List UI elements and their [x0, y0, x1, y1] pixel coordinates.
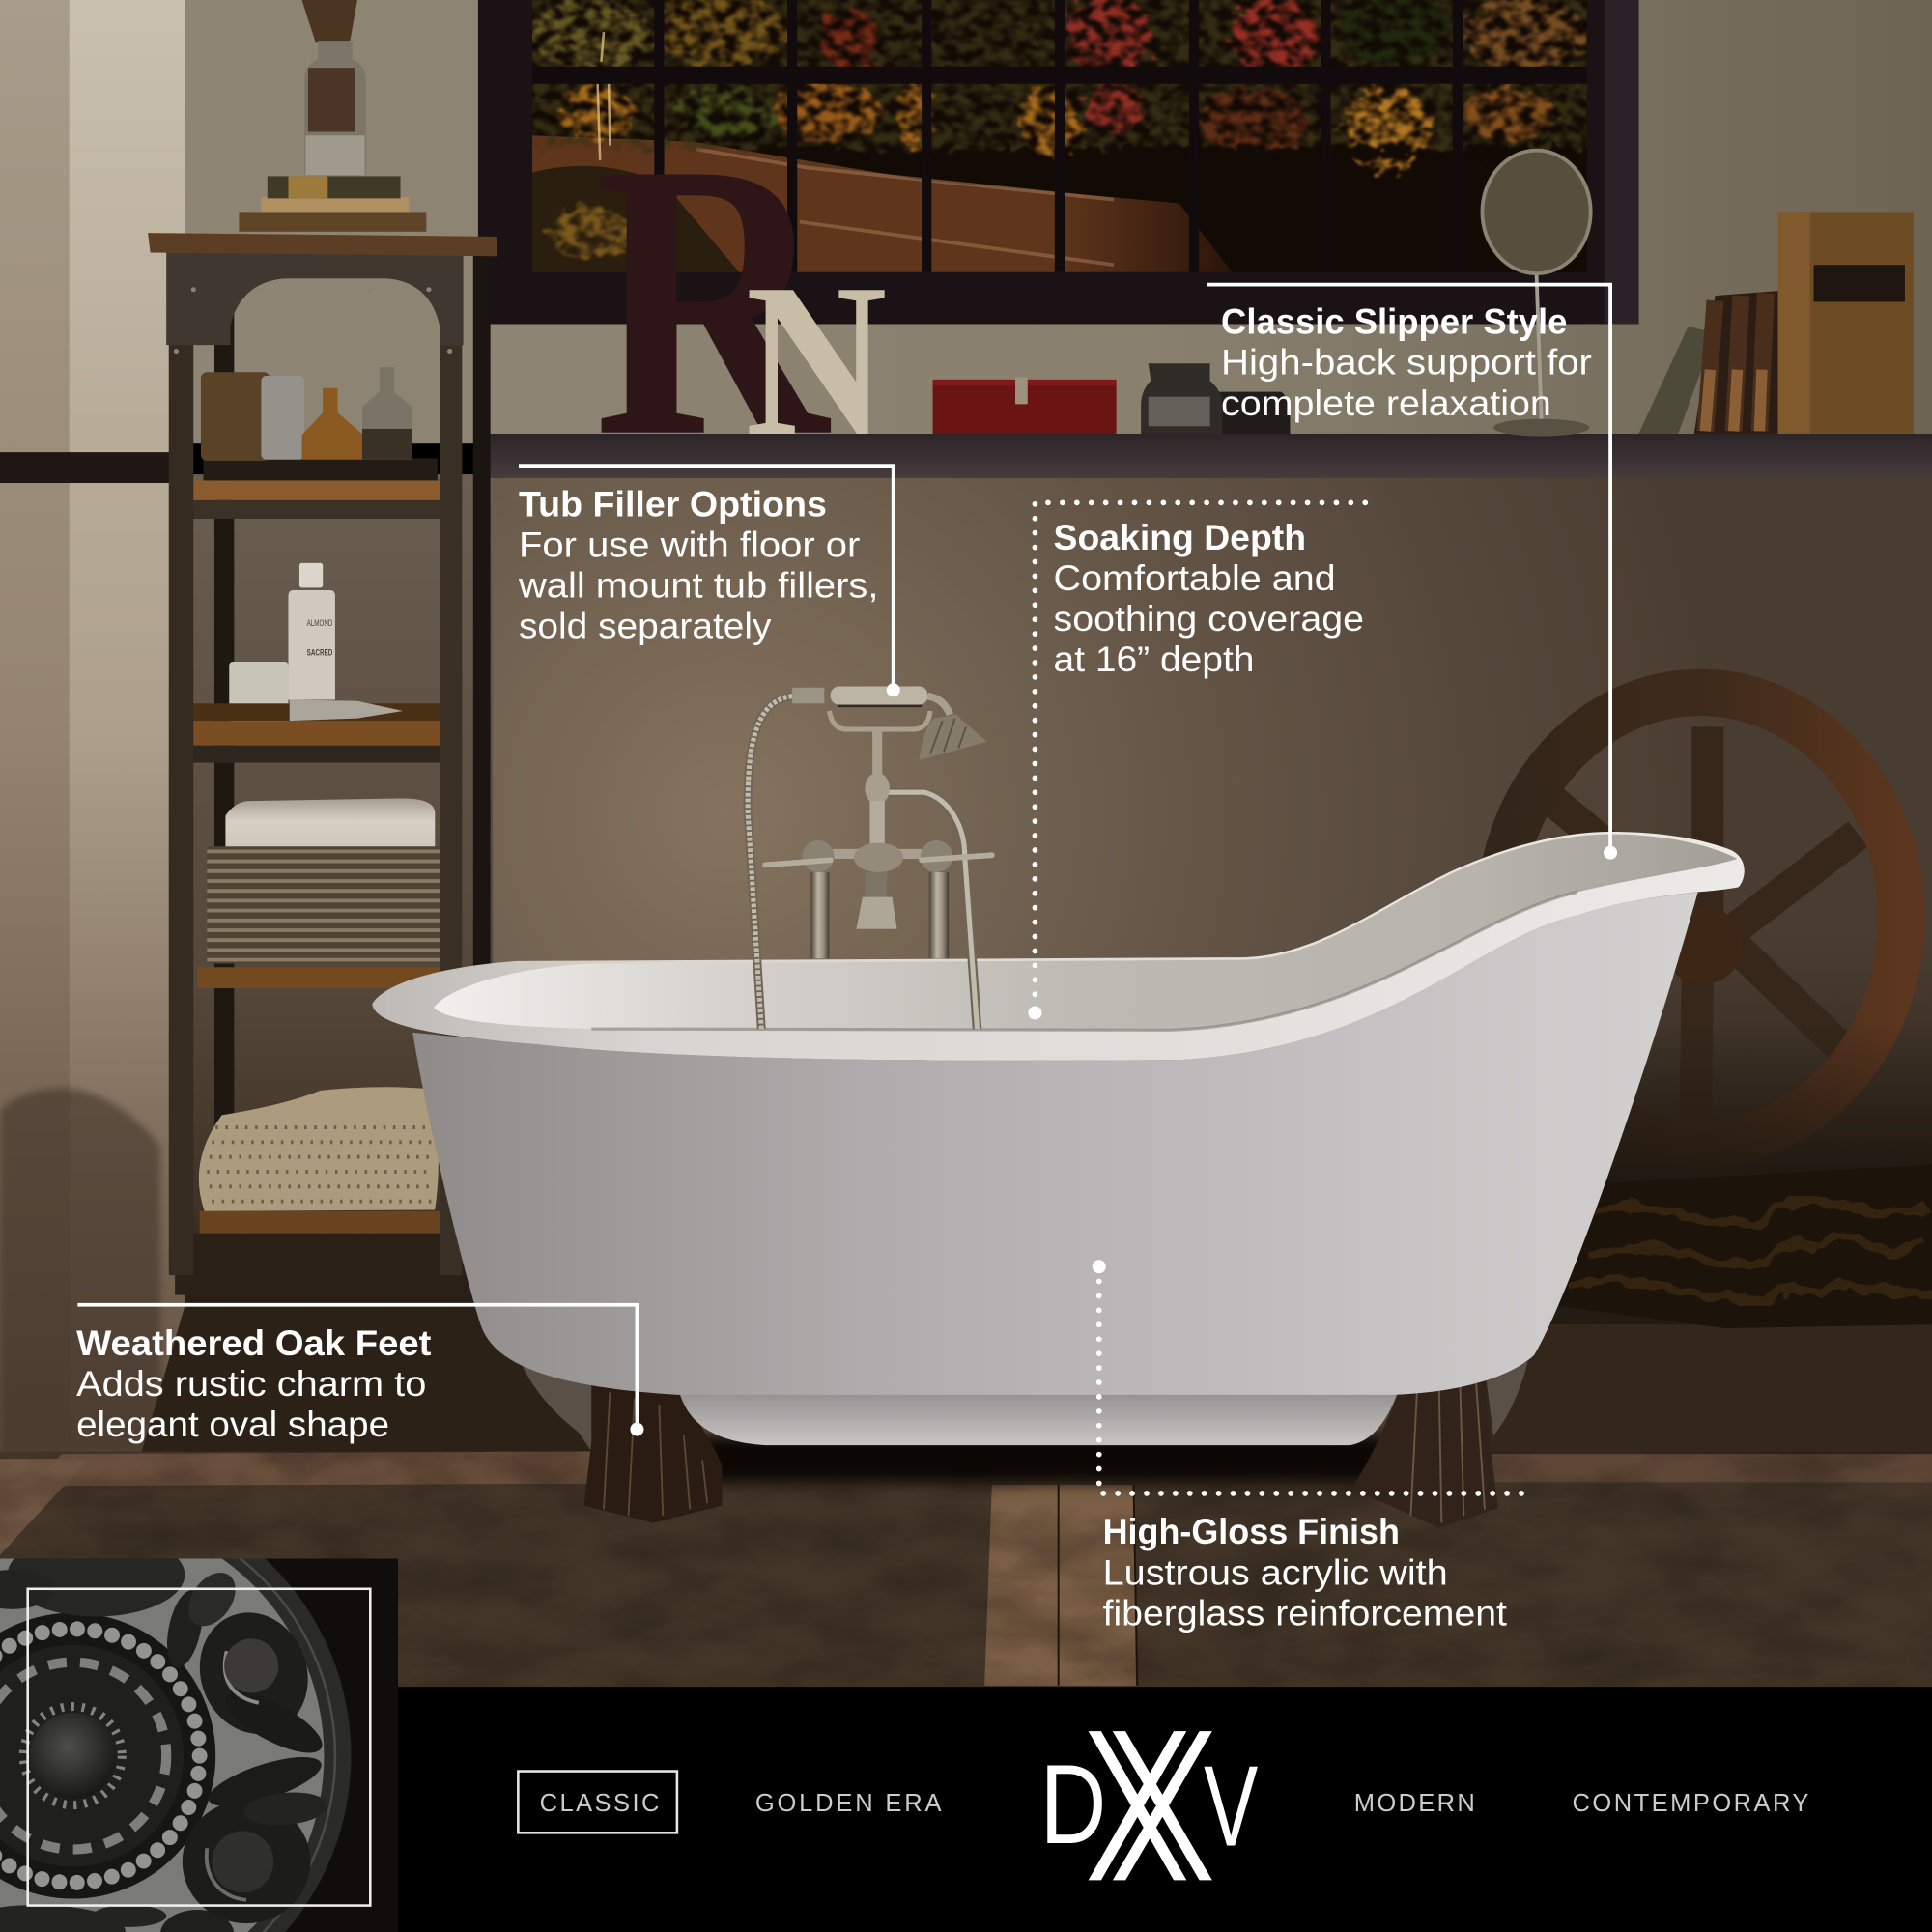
upper scroll coil: [199, 1612, 308, 1734]
horizontal muntin: [532, 67, 1587, 84]
foot grain: [1410, 1382, 1485, 1523]
leader dot: [630, 1423, 643, 1436]
tub pedestal base: [678, 1386, 1400, 1445]
table mirror: [1482, 151, 1591, 437]
silver tube: [290, 699, 403, 721]
floor back zone: [1479, 1324, 1932, 1455]
heading: Tub Filler Options: [519, 484, 827, 524]
shelf upper surface two: [191, 703, 441, 721]
nav: modern: MODERN: [1354, 1790, 1475, 1817]
floor texture: [0, 1452, 1932, 1688]
foot grain: [604, 1392, 707, 1516]
back left post: [214, 277, 234, 1263]
body line 2: wall mount tub fillers,: [518, 566, 878, 606]
table top plank: [148, 233, 497, 256]
nav: contemporary: CONTEMPORARY: [1573, 1790, 1808, 1817]
lower scroll coil: [183, 1801, 310, 1923]
nav: classic: CLASSIC: [540, 1790, 659, 1817]
bottle dark fill: [362, 429, 412, 460]
heading: Soaking Depth: [1054, 518, 1306, 557]
left hose highlight: [748, 696, 792, 1029]
valve hub: [854, 842, 903, 872]
floor shadow under tub: [690, 1435, 1405, 1482]
apothecary jars: [1141, 363, 1290, 434]
glass bottle: [362, 367, 412, 460]
footer bar: [398, 1687, 1932, 1932]
bottle: [304, 41, 366, 175]
dictionary spine: [1778, 212, 1810, 434]
medallion: [0, 1559, 352, 1932]
scroll top left: [0, 1570, 54, 1609]
right front post: [440, 252, 462, 1275]
leaf upper right: [179, 1564, 245, 1634]
wheel hub: [1663, 906, 1743, 984]
leader dot: [1604, 846, 1617, 860]
dictionary label: [1814, 265, 1905, 301]
tub rim: [372, 832, 1745, 1061]
left valve: [802, 840, 835, 872]
mirror base: [1493, 419, 1589, 437]
letter N decor: N: [746, 240, 887, 482]
pedestal grain: [1571, 1202, 1928, 1301]
left oak foot: [584, 1374, 722, 1523]
middle book: [261, 197, 409, 212]
book spines: [1705, 294, 1766, 431]
rim pale line: [239, 1559, 336, 1932]
spout neck: [865, 872, 887, 899]
nav: golden era: GOLDEN ERA: [755, 1790, 941, 1817]
bottle label: [308, 68, 355, 131]
upper scroll crescent: [225, 1651, 259, 1703]
heading: Classic Slipper Style: [1221, 302, 1567, 342]
feathers: [301, 0, 357, 42]
body line 1: Comfortable and: [1054, 558, 1336, 598]
hillside fence lines: [696, 149, 1114, 265]
amber bottle: [301, 388, 363, 460]
shelving unit: [148, 0, 497, 1295]
handshower connector: [792, 688, 824, 703]
white bottle: [288, 563, 335, 699]
box clasp: [1015, 377, 1028, 404]
right oak foot: [1351, 1375, 1498, 1528]
top book patch: [288, 176, 327, 198]
cross connector: [831, 850, 924, 858]
unit lower apron: [175, 1234, 470, 1295]
stacked books: [239, 176, 426, 232]
outdoor scene: [529, 0, 1589, 272]
storage jar: [201, 372, 270, 461]
wood wheel: [1479, 693, 1932, 1328]
wheel rim: [1499, 693, 1901, 1144]
interior lower shadow line: [591, 892, 1577, 1030]
book spine highlights: [1705, 370, 1762, 431]
DXV logo: [1040, 1731, 1258, 1880]
bright reflections: [598, 32, 610, 160]
body line 1: Adds rustic charm to: [76, 1364, 426, 1404]
body line 2: fiberglass reinforcement: [1103, 1593, 1507, 1633]
rolled towels: [225, 798, 435, 849]
tub filler faucet: [748, 686, 992, 1029]
leader dot: [887, 683, 900, 696]
spout bell: [856, 897, 897, 929]
glass bottle with feathers: [301, 0, 366, 175]
dotted leader: [1035, 502, 1365, 1005]
inset frame: [28, 1589, 370, 1906]
left post: [169, 252, 193, 1275]
right back post: [473, 252, 491, 980]
logo D: D: [1040, 1741, 1106, 1867]
logo X strands: [1089, 1731, 1212, 1880]
hillside: [532, 135, 1233, 272]
leaf mid lower: [242, 1789, 329, 1829]
heading: High-Gloss Finish: [1103, 1512, 1400, 1551]
basket weave: [207, 851, 441, 960]
shelf plank two: [192, 721, 440, 746]
detail inset medallion: [0, 1559, 398, 1932]
footer background: [398, 1687, 1932, 1932]
grip shadow: [838, 705, 922, 707]
red box: [933, 377, 1117, 434]
tub body: [412, 892, 1698, 1395]
dark zone left of tub: [142, 1306, 591, 1452]
right pipe and hose: [889, 792, 977, 1029]
body line 1: For use with floor or: [519, 526, 860, 565]
callout: tub filler options: [518, 466, 900, 696]
blanket knit stitches: [207, 1127, 434, 1202]
black wall rail: [0, 452, 173, 483]
shelf one apron: [191, 500, 440, 519]
body line 2: complete relaxation: [1221, 384, 1551, 423]
wood pedestal: [1559, 1164, 1932, 1328]
floor plank left: [37, 1452, 591, 1486]
jar left: [1141, 363, 1222, 434]
old books: [1694, 291, 1780, 434]
pilaster shade side: [0, 0, 69, 1466]
callout: classic slipper style: [1208, 285, 1617, 860]
right valve: [921, 840, 952, 872]
jar contents: [1149, 397, 1210, 426]
handshower head: [920, 715, 987, 760]
window: [478, 0, 1638, 324]
wall shelf: [487, 434, 1932, 478]
callout: weathered oak feet: [76, 1305, 643, 1444]
pilaster lit side: [69, 0, 185, 1466]
foot block: [584, 1374, 722, 1523]
candle: [229, 662, 288, 722]
logo V: V: [1204, 1744, 1258, 1871]
right pipe highlight: [889, 792, 977, 1029]
wicker basket: [207, 846, 441, 963]
leaning book: [1638, 327, 1716, 434]
leader line: [519, 466, 894, 690]
wheel spokes: [1550, 727, 1858, 1151]
plank seam: [1059, 1485, 1137, 1686]
window frame: [478, 0, 1638, 324]
shelf plank one: [191, 480, 440, 500]
body line 2: soothing coverage: [1054, 599, 1364, 639]
shelf plank four: [200, 1211, 443, 1234]
leader line: [77, 1305, 637, 1430]
letter R decor: R: [594, 82, 832, 519]
body line 1: Lustrous acrylic with: [1103, 1552, 1448, 1592]
bottle cap: [299, 563, 323, 587]
knit blanket: [199, 1087, 439, 1211]
lower scroll crescent: [207, 1848, 246, 1900]
centre floor planks: [984, 1485, 1136, 1686]
scroll bottom right: [93, 1905, 166, 1927]
silver shaker: [261, 376, 304, 460]
body line 1: High-back support for: [1221, 343, 1592, 383]
window glass: [532, 0, 1587, 272]
lower wall: [487, 474, 1932, 1460]
top apron with arch: [166, 252, 464, 345]
heading: Weathered Oak Feet: [76, 1323, 431, 1363]
mirror disc: [1482, 151, 1591, 273]
bottle body: [288, 590, 335, 699]
scroll bottom left: [0, 1905, 126, 1932]
bottle label: ALMOND: [307, 618, 332, 628]
pond reflection: [532, 166, 739, 272]
handshower grip: [831, 686, 927, 705]
rays ring: [23, 1707, 122, 1805]
leaf pair upper: [161, 1587, 209, 1671]
handshower neck: [927, 696, 950, 715]
box body: [933, 382, 1117, 434]
cradle: [829, 711, 930, 729]
shelf one tray: [203, 458, 438, 480]
jar right: [1213, 392, 1290, 434]
floor plank right: [1491, 1454, 1932, 1482]
riser lower: [871, 801, 883, 863]
body line 3: sold separately: [519, 607, 772, 646]
riser bulge: [865, 773, 890, 805]
shelf plank three: [197, 967, 443, 988]
apron rivets: [176, 290, 450, 352]
upper scroll orb: [224, 1638, 278, 1693]
leader dot: [1028, 1006, 1041, 1019]
cross handles: [765, 855, 992, 865]
medallion disc: [222, 1559, 352, 1932]
right books: [1638, 212, 1914, 434]
lower base scroll: [160, 1910, 234, 1932]
bottle lower glass: [305, 135, 365, 175]
body line 2: elegant oval shape: [76, 1405, 389, 1444]
lower scroll orb: [212, 1831, 273, 1892]
floor plank diagonal: [0, 1459, 89, 1555]
tub interior: [434, 835, 1737, 1030]
frame right bevel: [1605, 0, 1638, 324]
scroll top: [8, 1533, 185, 1616]
bathtub: [372, 832, 1745, 1528]
leader line: [1208, 285, 1610, 853]
callout: high-gloss finish: [1093, 1260, 1528, 1633]
inset background: [0, 1559, 398, 1932]
callout: soaking depth: [1028, 502, 1365, 1019]
body line 3: at 16” depth: [1054, 639, 1254, 679]
handshower head ribs: [930, 719, 966, 754]
medallion pale relief: [0, 1559, 325, 1932]
right feed pipe: [929, 872, 949, 958]
foliage: [529, 0, 1589, 261]
foot block: [1351, 1375, 1498, 1528]
mirror stem: [1537, 273, 1542, 421]
left feed pipe: [810, 872, 829, 958]
wheel lower shadow: [1479, 1023, 1932, 1189]
window mullions: [532, 0, 1587, 272]
wall dark falloff at right: [1454, 936, 1932, 1331]
petals ring: [0, 1662, 166, 1850]
box top edge: [933, 380, 1117, 385]
bead band: [0, 1629, 200, 1883]
floor: [0, 1452, 1932, 1688]
shadow side skirts: [518, 1355, 1528, 1441]
centre boss: [30, 1713, 116, 1799]
wall behind shelving: [185, 474, 493, 1337]
active style box: [518, 1772, 677, 1833]
upper scroll tail: [256, 1715, 323, 1752]
shelf two apron: [191, 746, 441, 763]
bottom book: [239, 212, 426, 232]
bottle label second line: SACRED: [307, 648, 333, 658]
leader dot: [1093, 1260, 1106, 1273]
central riser: [873, 729, 881, 788]
left hose: [748, 696, 792, 1029]
top book: [268, 176, 401, 198]
bead ring: [0, 1629, 200, 1883]
wall shadow at lower left: [0, 1088, 160, 1454]
dotted leader: [1099, 1282, 1528, 1493]
upper wall: [185, 0, 1932, 443]
leaf mid right: [203, 1747, 327, 1816]
dictionary: [1778, 212, 1914, 434]
